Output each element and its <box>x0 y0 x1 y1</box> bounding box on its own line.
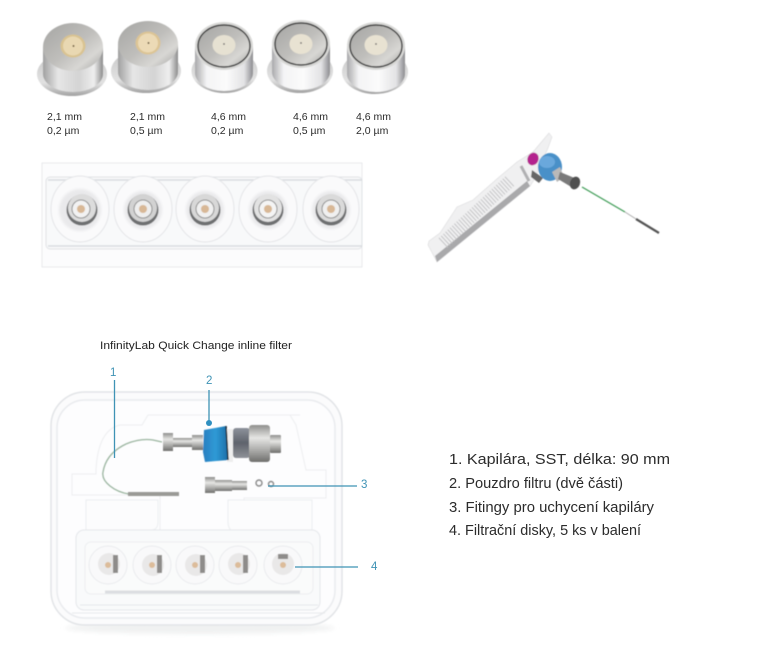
callout 3: 3 <box>361 479 367 491</box>
five filter discs <box>89 546 302 584</box>
label: disc 2: 2,1 mm <box>130 111 165 123</box>
label: disc 4: 0,5 µm <box>293 125 326 137</box>
tray disc 3 <box>186 191 224 229</box>
tray disc 5 <box>312 191 350 229</box>
disc 3 <box>192 22 258 93</box>
item 1: 1. Kapilára, SST, délka: 90 mm <box>449 452 670 468</box>
callout 4 <box>295 561 378 573</box>
label: disc 5: 4,6 mm <box>356 111 391 123</box>
fitting behind cap <box>531 170 543 183</box>
callout 2: 2 <box>206 375 212 387</box>
disc 1 <box>37 23 107 96</box>
illustration: filter cartridge on holder with capillary <box>428 133 659 262</box>
photo: blister tray with five discs <box>42 163 362 267</box>
photo: kit tray <box>51 392 342 634</box>
green capillary and steel tube <box>103 440 179 496</box>
photo: top row of five filter discs <box>37 20 408 96</box>
label: disc 4: 4,6 mm <box>293 111 328 123</box>
callout 4: 4 <box>371 561 378 573</box>
green capillary <box>582 187 625 212</box>
disc 2 <box>111 21 181 93</box>
label: disc 1: 0,2 µm <box>47 125 80 137</box>
disc size labels <box>47 111 391 137</box>
ferrule rings <box>256 480 274 486</box>
callout 1 <box>110 367 116 458</box>
blue cap <box>538 153 562 181</box>
magenta marker <box>525 151 541 167</box>
item 4: 4. Filtrační disky, 5 ks v balení <box>449 523 641 539</box>
parts list <box>449 452 670 539</box>
disc 4 <box>267 20 333 93</box>
label: disc 2: 0,5 µm <box>130 125 163 137</box>
threaded bolt <box>552 167 582 191</box>
small fitting <box>205 477 247 493</box>
title: inline filter: InfinityLab Quick Change inline filter <box>100 340 292 352</box>
tray disc 1 <box>59 189 101 231</box>
callout 1: 1 <box>110 367 116 379</box>
tray disc 4 <box>249 191 287 229</box>
label: disc 3: 4,6 mm <box>211 111 246 123</box>
capillary tip <box>625 212 659 233</box>
tray body <box>51 392 342 634</box>
holder plate <box>428 133 552 262</box>
tray disc 2 <box>124 191 162 229</box>
disc 5 <box>342 22 408 94</box>
label: disc 3: 0,2 µm <box>211 125 244 137</box>
filter housing <box>163 425 281 462</box>
callout 2 <box>206 375 212 426</box>
callout 3 <box>268 479 367 491</box>
label: disc 1: 2,1 mm <box>47 111 82 123</box>
label: disc 5: 2,0 µm <box>356 125 389 137</box>
item 3: 3. Fitingy pro uchycení kapiláry <box>449 500 655 516</box>
item 2: 2. Pouzdro filtru (dvě části) <box>449 476 623 492</box>
